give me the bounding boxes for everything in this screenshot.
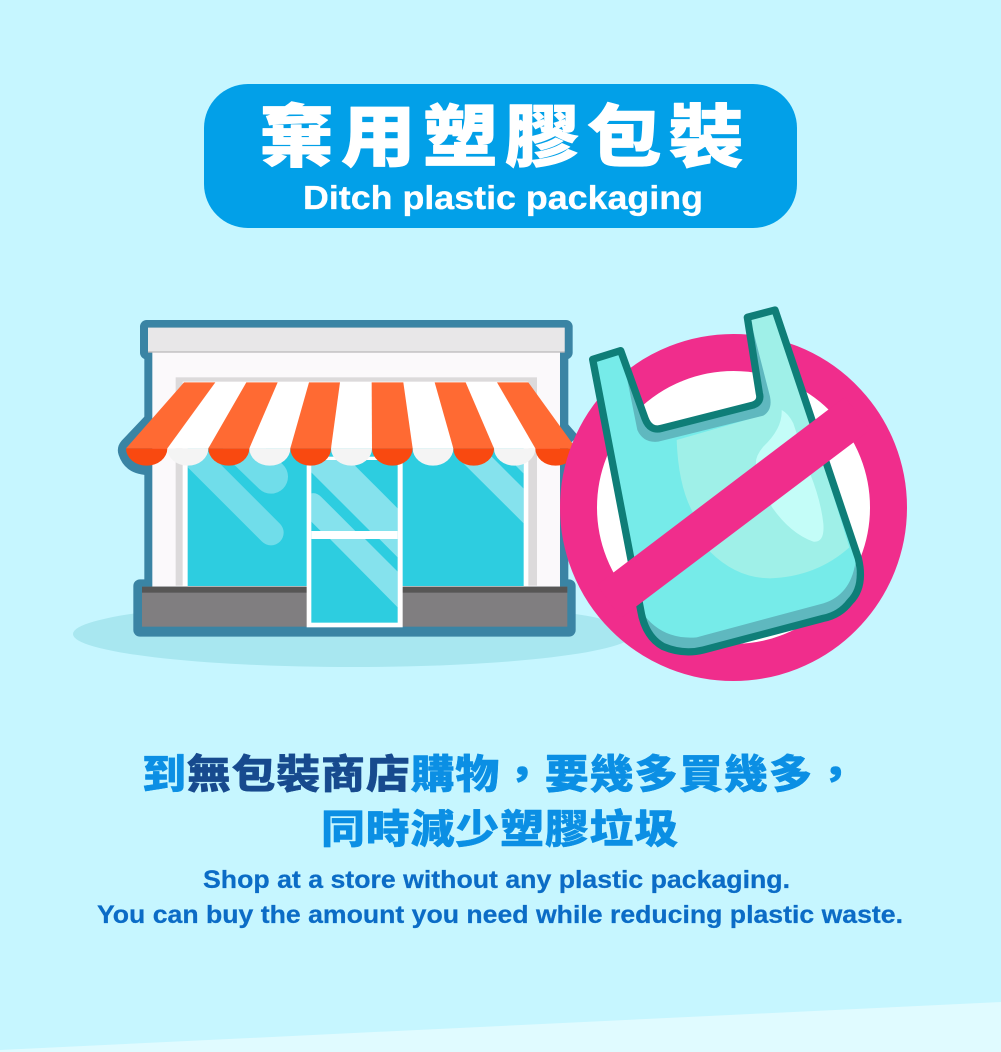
store wall	[152, 352, 560, 587]
bag shadow: bottom	[644, 563, 858, 652]
icon: no plastic bag	[578, 310, 888, 662]
title: English: Ditch plastic packaging	[303, 179, 703, 216]
plastic bag	[593, 310, 860, 652]
awning	[126, 382, 576, 466]
store fascia	[148, 328, 565, 353]
body text: English	[97, 866, 903, 929]
window frame	[176, 377, 537, 586]
base	[142, 587, 567, 627]
store outline	[118, 320, 578, 637]
background wedge	[0, 1002, 1001, 1052]
door	[307, 457, 403, 627]
bag inner fold	[677, 313, 849, 578]
title badge	[204, 84, 797, 228]
line 2: 同時減少塑膠垃圾	[321, 807, 679, 852]
bag outline	[593, 310, 860, 652]
title: Chinese: 棄用塑膠包裝	[259, 100, 751, 176]
window glass	[188, 447, 524, 586]
ground shadow	[73, 601, 633, 667]
line 2: You can buy the amount you need while reducing plastic waste.	[97, 901, 903, 929]
prohibition circle	[578, 352, 888, 662]
icon: storefront	[118, 320, 578, 637]
scallops	[167, 448, 535, 466]
prohibition slash	[597, 397, 870, 618]
white stripes	[167, 382, 535, 448]
bag shadow: handles	[624, 325, 771, 442]
bag highlight	[756, 410, 824, 542]
line 1: 到無包裝商店購物，要幾多買幾多，	[142, 752, 858, 797]
body text: Chinese	[142, 752, 858, 852]
orange stripes	[126, 382, 576, 448]
line 1: Shop at a store without any plastic packaging.	[203, 866, 790, 894]
